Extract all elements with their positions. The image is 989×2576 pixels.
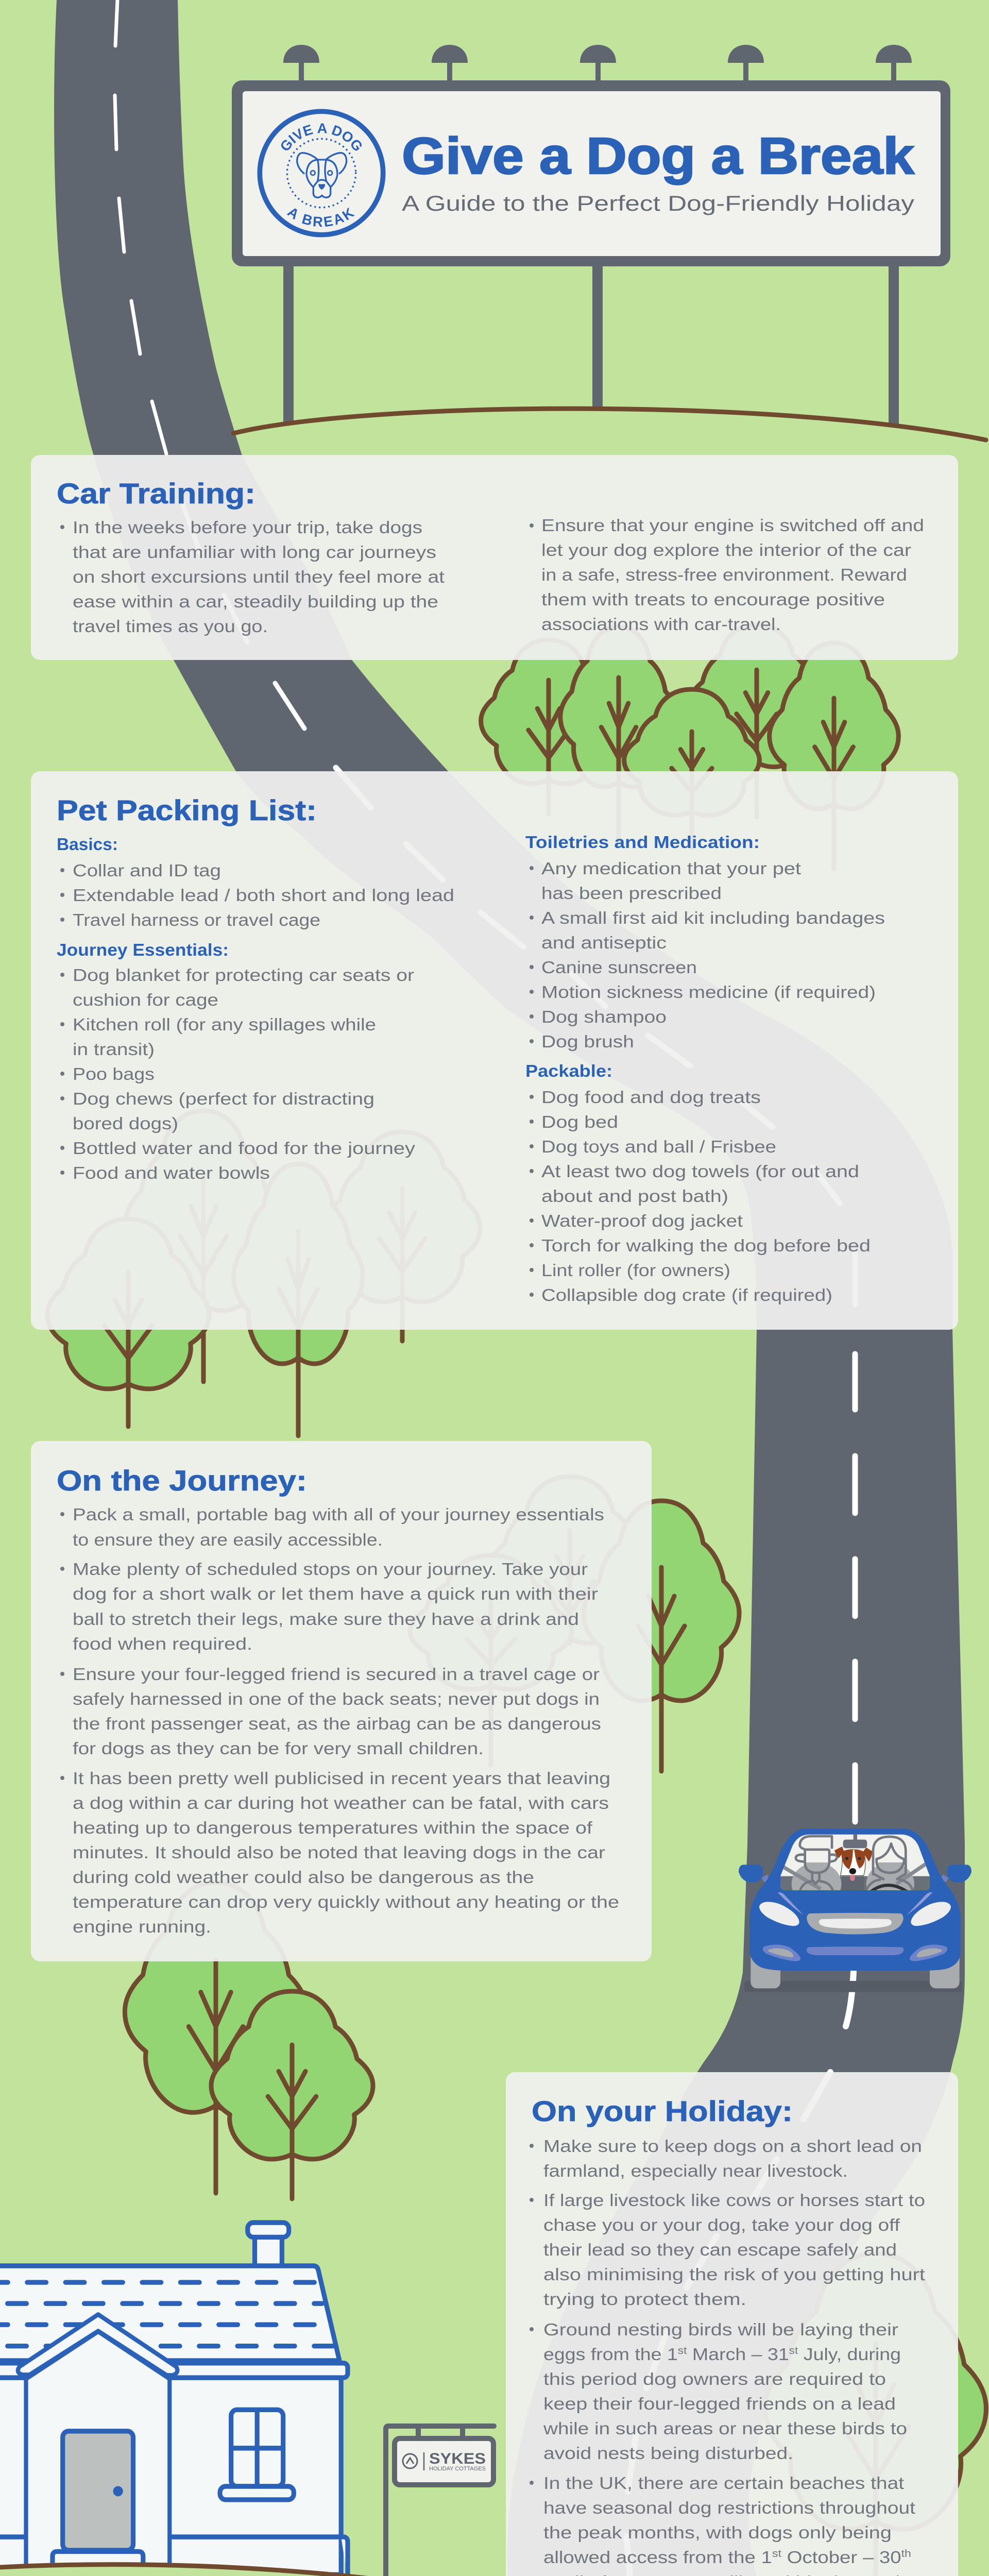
packable list: Dog food and dog treats — [541, 1088, 761, 1107]
journey essentials list: in transit) — [73, 1040, 155, 1059]
headlights — [759, 1902, 951, 1926]
tree cluster: middle left — [47, 1111, 480, 1436]
holiday bullets: st — [772, 2548, 781, 2560]
journey bullets: ball to stretch their legs, make sure they have a drink and — [73, 1609, 579, 1629]
journey essentials list: Bottled water and food for the journey — [73, 1139, 416, 1158]
journey bullets: during cold weather could also be dangerous as the — [73, 1868, 534, 1887]
journey bullets: the front passenger seat, as the airbag can be as dangerous — [73, 1714, 601, 1733]
journey bullets: for dogs as they can be for very small children. — [73, 1739, 484, 1758]
basics list: Travel harness or travel cage — [73, 910, 320, 929]
lower hill — [0, 2565, 453, 2576]
holiday bullets: In the UK, there are certain beaches that — [543, 2473, 904, 2493]
holiday bullets: avoid nests being disturbed. — [543, 2444, 793, 2463]
basics list — [57, 835, 454, 929]
packable list: Lint roller (for owners) — [541, 1261, 730, 1280]
walls — [0, 2378, 341, 2574]
holiday bullets — [532, 2137, 932, 2576]
holiday bullets: March – 31 — [687, 2345, 789, 2364]
car body — [749, 1828, 961, 1971]
emblem: GIVE A DOG — [281, 124, 362, 151]
right column text: Ensure that your engine is switched off and — [541, 516, 924, 535]
toiletries and medication list: Toiletries and Medication: — [525, 833, 760, 852]
holiday bullets: allowed access from the 1 — [543, 2548, 740, 2567]
holiday bullets: trying to protect them. — [543, 2290, 746, 2309]
holiday bullets: Ground nesting birds will be laying their — [543, 2320, 898, 2339]
packable list: Collapsible dog crate (if required) — [541, 1285, 832, 1304]
grille — [807, 1913, 903, 1934]
tree cluster: lower left — [125, 1883, 373, 2199]
heading: Car Training: — [57, 477, 255, 510]
window — [231, 2410, 283, 2486]
journey bullets: a dog within a car during hot weather can be fatal, with cars — [73, 1793, 609, 1812]
ground mask under cottage — [0, 2565, 454, 2576]
packable list: Torch for walking the dog before bed — [541, 1236, 871, 1255]
journey bullets: Pack a small, portable bag with all of your journey essentials — [73, 1505, 604, 1524]
car — [739, 1828, 971, 1992]
holiday bullets: October – 30 — [781, 2548, 901, 2567]
journey bullets: heating up to dangerous temperatures within the space of — [73, 1818, 593, 1837]
toiletries and medication list: Canine sunscreen — [541, 958, 697, 977]
lower intake — [807, 1946, 903, 1955]
basics list: Basics: — [57, 835, 118, 854]
holiday bullets: st — [678, 2345, 687, 2357]
journey bullets: engine running. — [73, 1917, 211, 1936]
journey essentials list — [57, 940, 416, 1182]
packable list: about and post bath) — [541, 1187, 728, 1206]
chimney — [255, 2236, 282, 2267]
packable list: Packable: — [525, 1061, 612, 1080]
basics list: Collar and ID tag — [73, 861, 221, 880]
holiday bullets: also minimising the risk of you getting hurt — [543, 2265, 925, 2284]
right column text — [530, 516, 924, 634]
packable list: Water-proof dog jacket — [541, 1211, 743, 1230]
journey essentials list: bored dogs) — [73, 1114, 178, 1133]
cottage — [0, 2223, 348, 2576]
journey bullets: to ensure they are easily accessible. — [73, 1530, 383, 1549]
panel: pet packing list — [31, 771, 958, 1330]
tree cluster: top — [481, 625, 898, 869]
right column text: let your dog explore the interior of the car — [541, 540, 911, 560]
holiday bullets: keep their four-legged friends on a lead — [543, 2394, 896, 2413]
holiday bullets: farmland, especially near livestock. — [543, 2161, 848, 2180]
billboard frame — [232, 80, 950, 266]
holiday bullets: their lead so they can escape safely and — [543, 2240, 897, 2259]
holiday bullets: the peak months, with dogs only being — [543, 2523, 892, 2542]
journey essentials list: cushion for cage — [73, 990, 218, 1009]
toiletries and medication list: and antiseptic — [541, 933, 667, 952]
holiday bullets: this period dog owners are required to — [543, 2369, 886, 2388]
roof — [0, 2266, 339, 2361]
heading: On the Journey: — [57, 1464, 307, 1497]
roof tile dashes — [0, 2282, 333, 2346]
eaves — [0, 2363, 348, 2378]
journey essentials list: Food and water bowls — [73, 1163, 270, 1182]
holiday bullets: have seasonal dog restrictions throughout — [543, 2498, 915, 2517]
mirror stalks — [761, 1874, 949, 1882]
left column text: on short excursions until they feel more at — [73, 567, 445, 586]
car shadow — [744, 1981, 962, 1992]
panel: on the journey — [31, 1441, 652, 1961]
toiletries and medication list — [525, 833, 885, 1051]
holiday bullets: st — [789, 2345, 798, 2357]
journey bullets: It has been pretty well publicised in recent years that leaving — [73, 1769, 610, 1788]
holiday cottages sign: HOLIDAY COTTAGES — [429, 2466, 486, 2472]
panel: on your holiday — [506, 2072, 958, 2576]
holiday bullets: Make sure to keep dogs on a short lead on — [543, 2137, 922, 2156]
holiday bullets: chase you or your dog, take your dog off — [543, 2215, 900, 2234]
tree behind holiday panel — [765, 2253, 986, 2576]
left column text: In the weeks before your trip, take dogs — [73, 518, 422, 537]
journey essentials list: Poo bags — [73, 1064, 155, 1083]
journey essentials list: Kitchen roll (for any spillages while — [73, 1015, 376, 1034]
journey bullets: food when required. — [73, 1634, 252, 1653]
right column text: in a safe, stress-free environment. Reward — [541, 565, 907, 584]
packable list: Dog bed — [541, 1112, 618, 1131]
toiletries and medication list: Motion sickness medicine (if required) — [541, 982, 876, 1002]
holiday bullets: while in such areas or near these birds to — [543, 2419, 907, 2438]
toiletries and medication list: Any medication that your pet — [541, 859, 801, 878]
heading: On your Holiday: — [532, 2095, 793, 2127]
basics list: Extendable lead / both short and long lead — [73, 886, 454, 905]
billboard posts — [283, 263, 899, 425]
porch — [26, 2331, 169, 2576]
emblem — [258, 109, 385, 237]
hill — [233, 409, 986, 440]
journey bullets: temperature can drop very quickly without any heating or the — [73, 1892, 619, 1911]
door — [63, 2431, 133, 2550]
holiday bullets: th — [901, 2548, 911, 2560]
packable list: At least two dog towels (for out and — [541, 1162, 859, 1181]
journey bullets: Make plenty of scheduled stops on your journey. Take your — [73, 1560, 588, 1579]
dog — [834, 1846, 872, 1881]
holiday bullets: July, during — [798, 2345, 901, 2364]
journey essentials list: Dog blanket for protecting car seats or — [73, 965, 414, 985]
toiletries and medication list: Dog shampoo — [541, 1007, 667, 1026]
windscreen and passengers — [780, 1834, 930, 1890]
door step — [53, 2551, 143, 2570]
wheels — [751, 1951, 960, 1988]
left column text: that are unfamiliar with long car journeys — [73, 543, 436, 562]
mirrors — [739, 1865, 971, 1883]
billboard lamps — [283, 45, 912, 82]
fog lights — [763, 1945, 947, 1961]
emblem: A BREAK — [286, 207, 355, 227]
packable list: Dog toys and ball / Frisbee — [541, 1137, 776, 1156]
journey essentials list: Journey Essentials: — [57, 940, 229, 959]
panel: car training — [31, 455, 958, 660]
title: Give a Dog a Break — [402, 127, 914, 185]
journey bullets: Ensure your four-legged friend is secured in a travel cage or — [73, 1665, 600, 1684]
journey bullets — [62, 1505, 619, 1936]
right column text: associations with car-travel. — [541, 615, 781, 634]
journey bullets: safely harnessed in one of the back seats; never put dogs in — [73, 1689, 600, 1708]
toiletries and medication list: has been prescribed — [541, 884, 722, 903]
journey bullets: minutes. It should also be noted that leaving dogs in the car — [73, 1843, 605, 1862]
left column text — [60, 518, 445, 636]
holiday cottages sign: SYKES — [429, 2450, 486, 2467]
right column text: them with treats to encourage positive — [541, 590, 885, 609]
heading: Pet Packing List: — [57, 794, 317, 826]
holiday bullets: If large livestock like cows or horses start to — [543, 2191, 925, 2210]
left column text: travel times as you go. — [73, 617, 268, 636]
journey essentials list: Dog chews (perfect for distracting — [73, 1089, 374, 1108]
trees beside journey panel — [410, 1477, 739, 1771]
toiletries and medication list: Dog brush — [541, 1032, 634, 1051]
packable list — [525, 1061, 871, 1304]
billboard — [231, 45, 988, 442]
bonnet creases — [778, 1892, 932, 1915]
holiday bullets: eggs from the 1 — [543, 2345, 661, 2364]
holiday cottages sign — [386, 2426, 494, 2576]
subtitle: A Guide to the Perfect Dog-Friendly Holiday — [402, 191, 914, 215]
toiletries and medication list: A small first aid kit including bandages — [541, 908, 885, 927]
left column text: ease within a car, steadily building up the — [73, 592, 438, 611]
journey bullets: dog for a short walk or let them have a quick run with their — [73, 1584, 598, 1603]
